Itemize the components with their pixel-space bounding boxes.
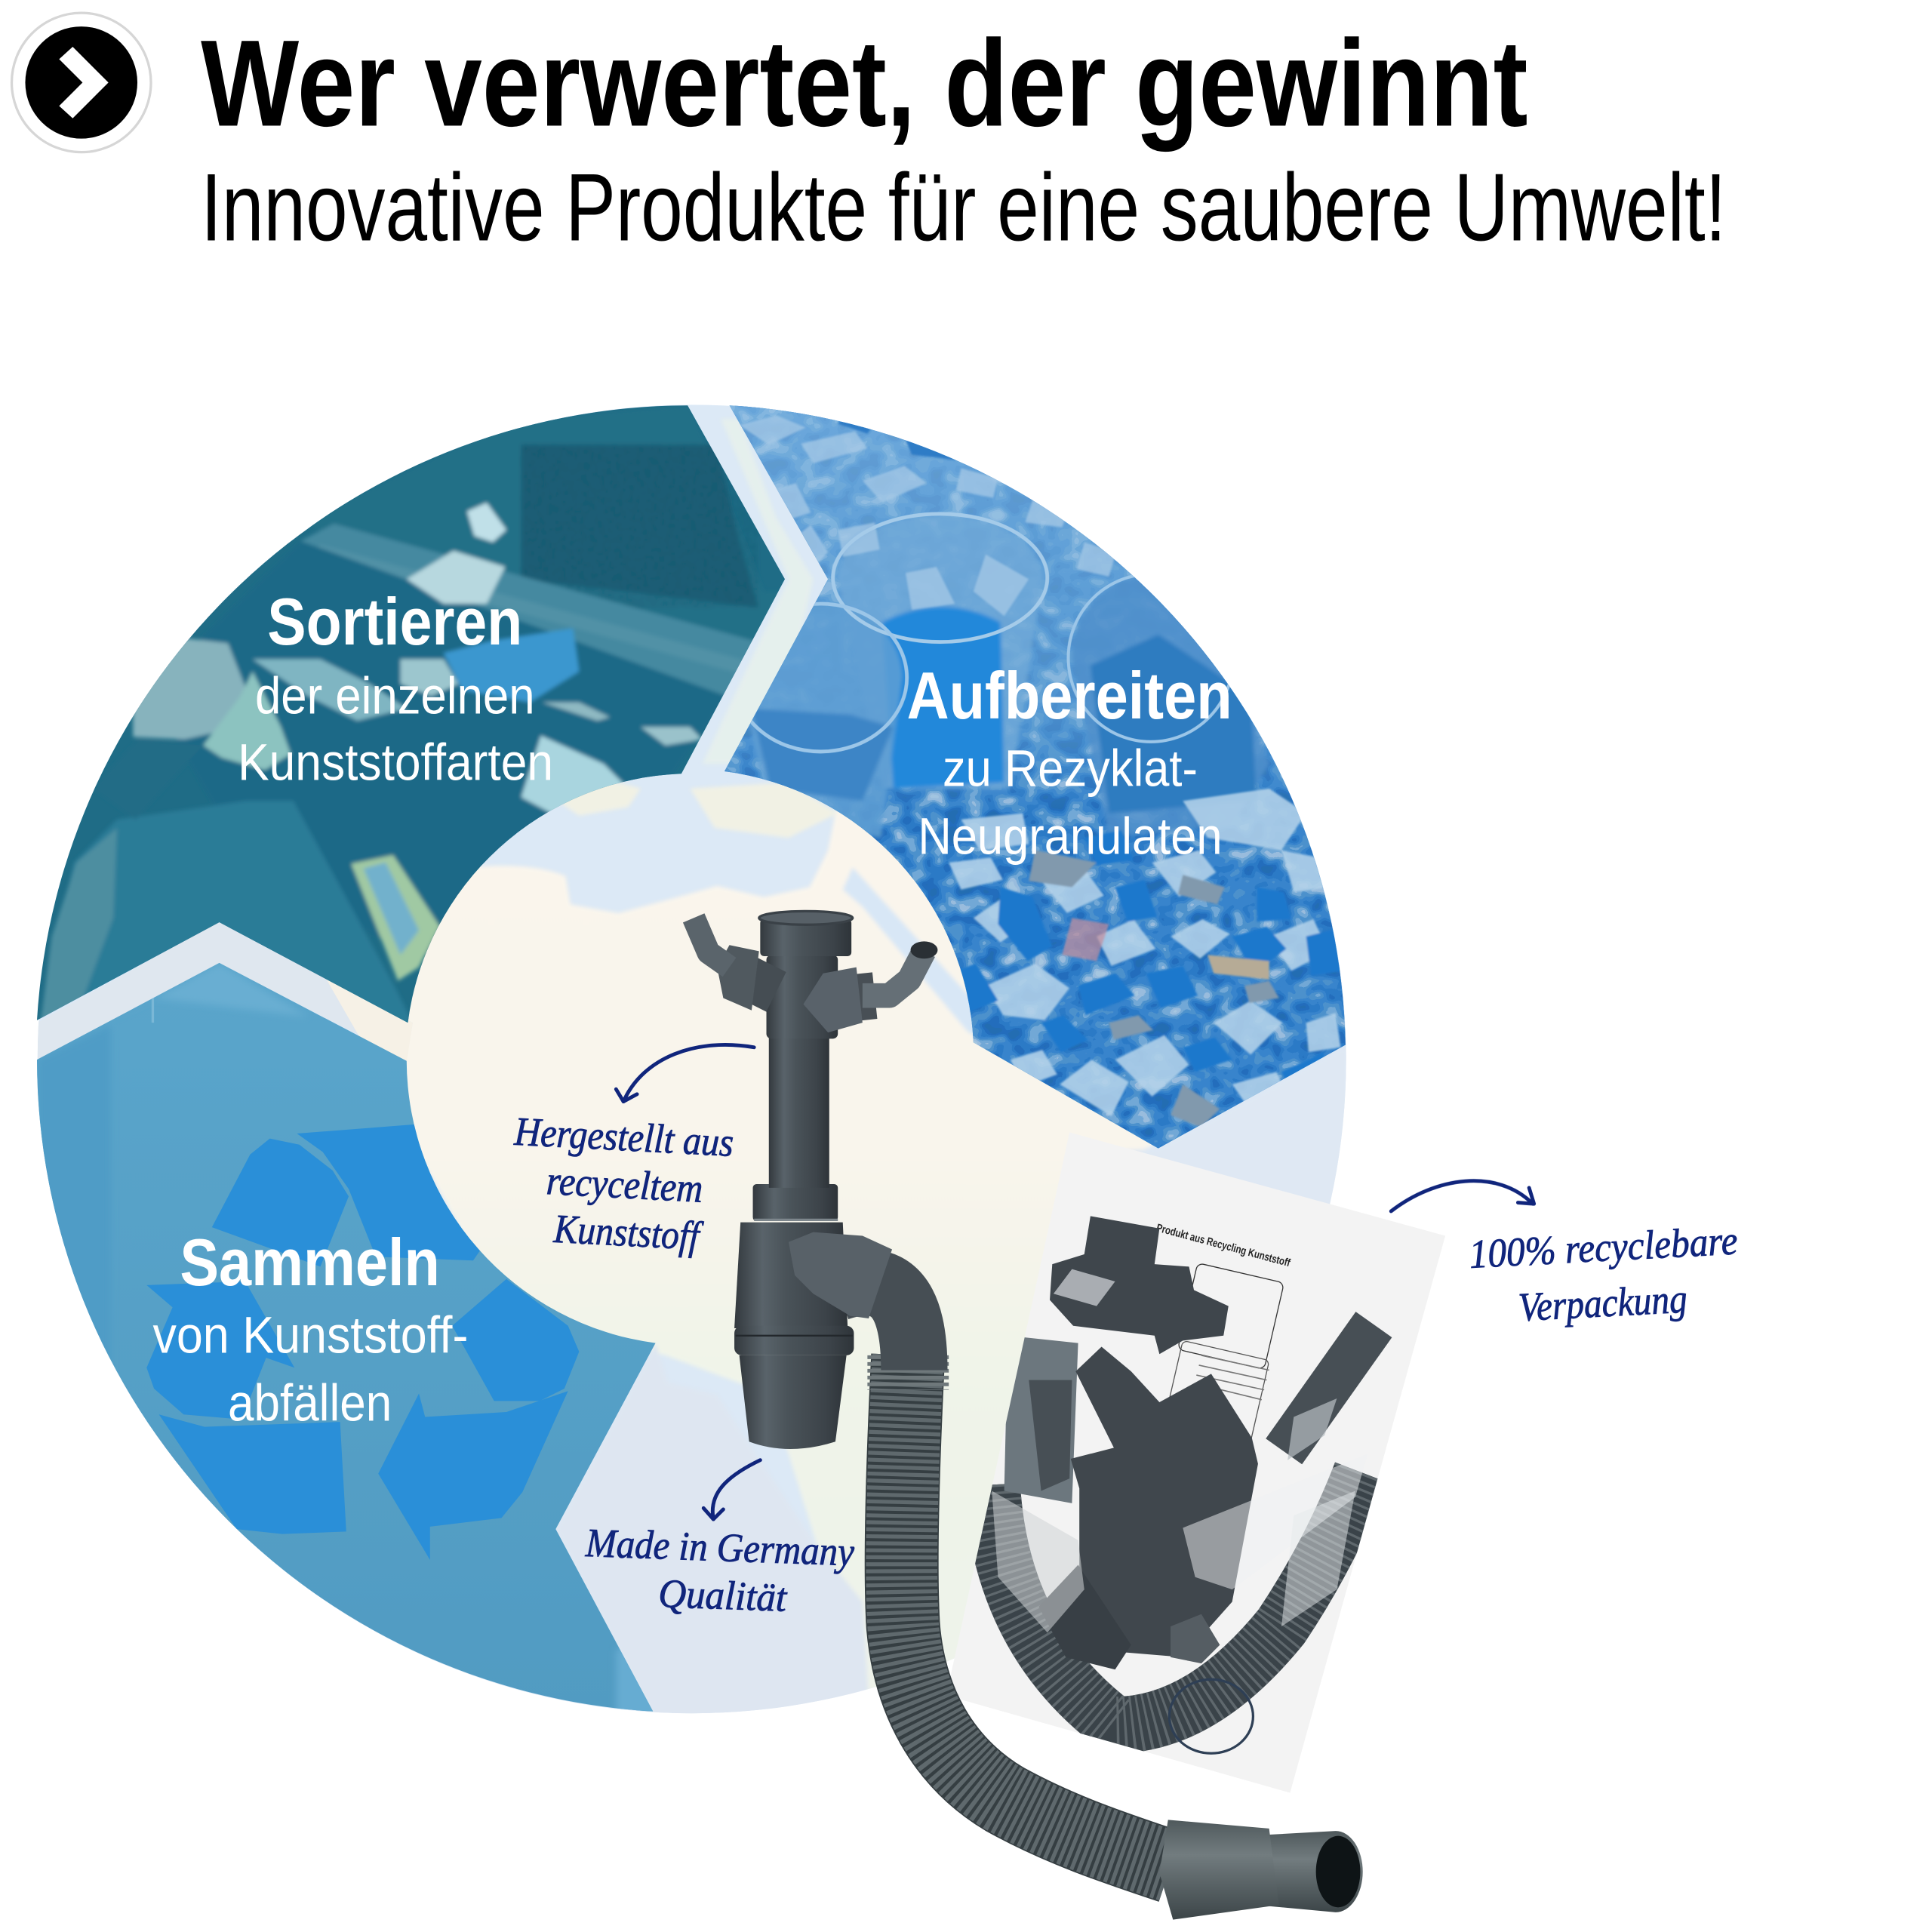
label: Sortieren: der einzelnen [255, 666, 535, 724]
label: Sammeln [152, 1225, 468, 1432]
right branch [803, 941, 937, 1032]
label: Sammeln: Sammeln [180, 1225, 440, 1300]
icon: recycling arrows [146, 1124, 579, 1560]
recycling circle [37, 405, 1355, 1719]
arrow [1391, 1181, 1534, 1211]
note [584, 1520, 855, 1620]
callout: made in Germany [584, 1460, 855, 1620]
header [12, 13, 1726, 260]
arrow [703, 1460, 760, 1519]
label: Aufbereiten: zu Rezyklat- [943, 740, 1198, 798]
label: Sortieren [238, 584, 553, 791]
note: Kunststoff [552, 1206, 705, 1259]
note: recyceltem [546, 1158, 704, 1211]
title: Wer verwertet, der gewinnt [201, 14, 1527, 152]
callout: recyclable packaging [1391, 1181, 1739, 1330]
note: Verpackung [1518, 1276, 1688, 1330]
note [512, 1109, 735, 1259]
label: Sammeln: abfällen [228, 1374, 392, 1432]
photo: collection bin [37, 964, 666, 1719]
elbow pipe [838, 1282, 914, 1371]
bag film [946, 1132, 1445, 1793]
product: siphon with hose [694, 911, 1363, 1920]
label: Sammeln: von Kunststoff- [152, 1306, 468, 1364]
label on bag [1155, 1222, 1291, 1442]
product bag [946, 1132, 1445, 1793]
label: Aufbereiten: Aufbereiten [907, 658, 1232, 733]
photo: sorting belt [37, 405, 814, 1035]
label: Aufbereiten: Neugranulaten [918, 807, 1223, 865]
bag contents [992, 1216, 1374, 1725]
rubber ring [1169, 1679, 1253, 1753]
label: Aufbereiten [907, 658, 1232, 865]
left branch [694, 918, 777, 1011]
arrow [616, 1044, 754, 1102]
callout: made from recycled plastic [512, 1044, 754, 1259]
icon: round chevron badge [12, 13, 151, 152]
note: Made in Germany [584, 1520, 855, 1574]
label on bag: Produkt aus Recycling Kunststoff [1155, 1222, 1291, 1269]
label: Sortieren: Kunststoffarten [238, 733, 553, 791]
panel: Aufbereiten [690, 405, 1355, 1157]
note [1468, 1217, 1739, 1330]
note: Qualität [657, 1571, 789, 1620]
siphon body [734, 911, 892, 1449]
photo: plastic flakes and cups [690, 405, 1355, 1157]
world map background [37, 405, 1348, 1719]
note: 100% recyclebare [1468, 1217, 1739, 1277]
panel: Sammeln [37, 961, 678, 1719]
panel: Sortieren [37, 405, 814, 1035]
label: Sortieren: Sortieren [267, 584, 522, 659]
note: Hergestellt aus [512, 1109, 735, 1165]
corrugated hose [902, 1355, 1171, 1866]
hose connector [1159, 1820, 1363, 1920]
